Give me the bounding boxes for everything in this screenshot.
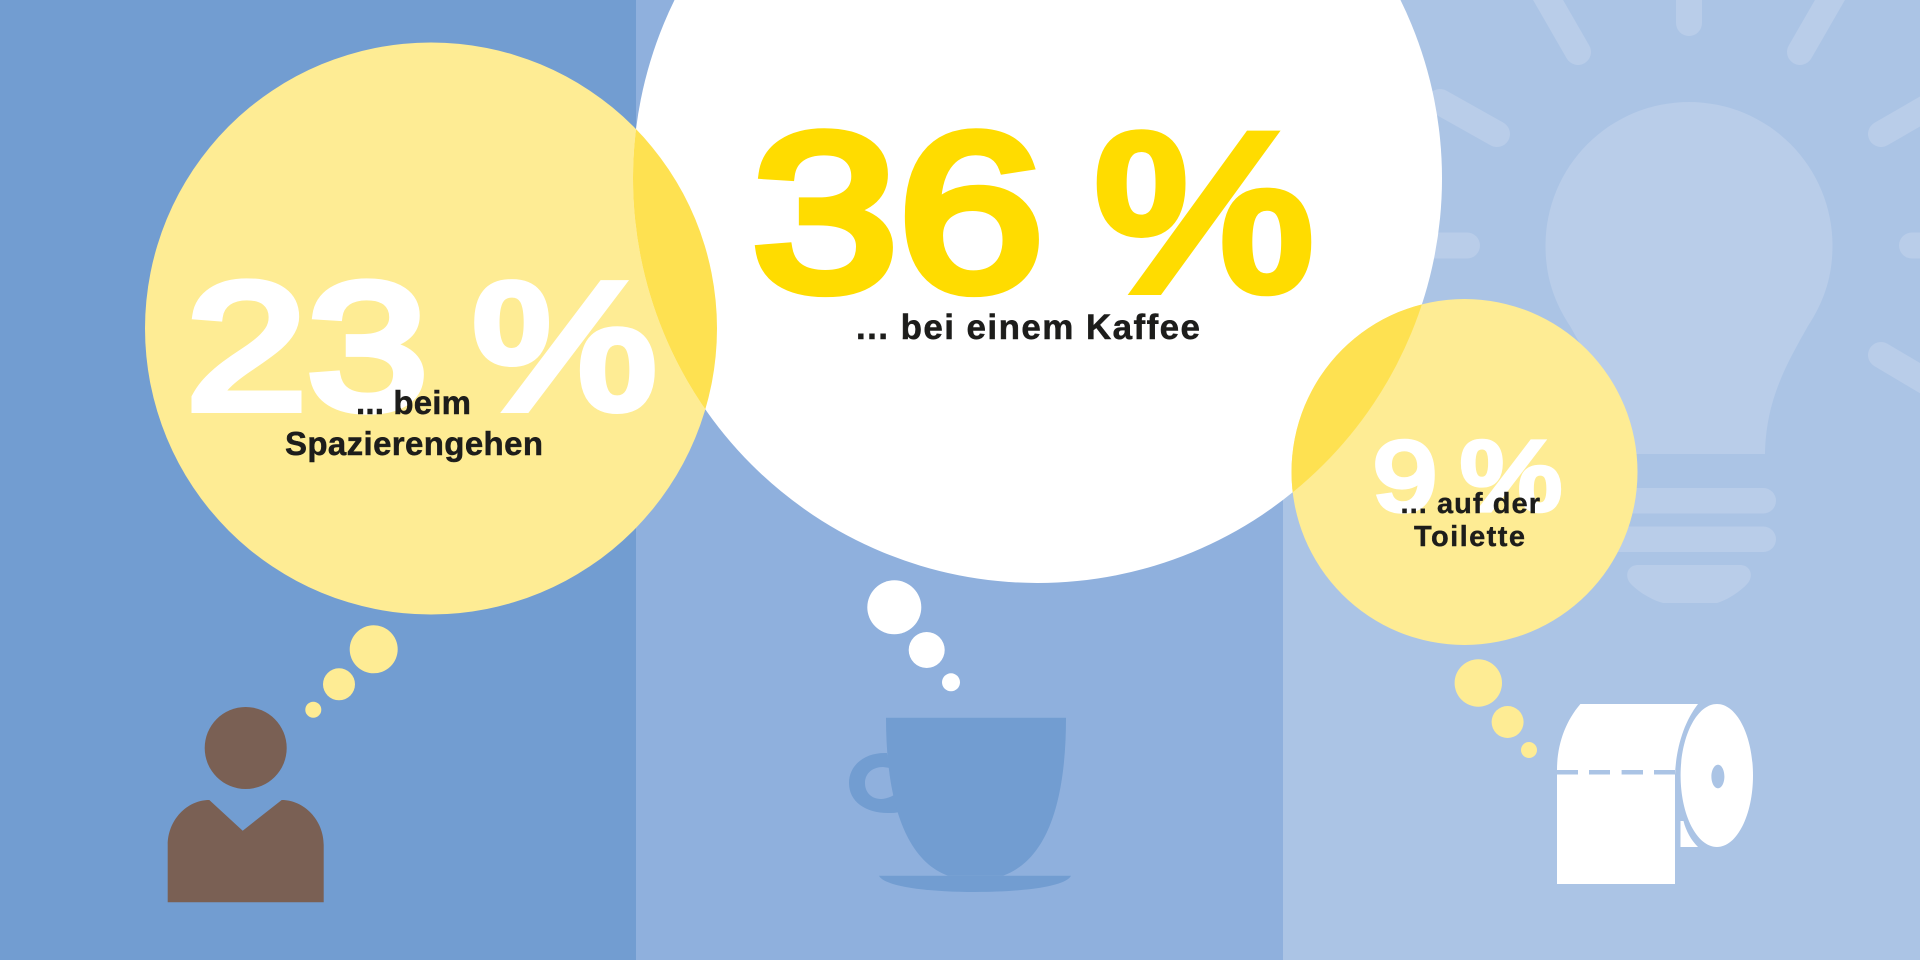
figure: 23 percent: 23: [186, 246, 428, 448]
figure: 36 percent: 36: [752, 88, 1044, 338]
panel: toilet background: [1283, 0, 1920, 960]
bubbles: toilet thought trail: [1455, 659, 1537, 758]
icon: toilet paper roll: [1557, 704, 1753, 884]
overlap: walking and coffee circles: [633, 129, 717, 410]
figure: 23 percent: %: [472, 246, 657, 448]
label: auf der Toilette: ... auf der: [1400, 488, 1540, 520]
bubbles: coffee thought trail: [867, 580, 960, 691]
label: auf der Toilette: [1400, 488, 1540, 553]
icon: person: [168, 707, 324, 902]
overlap: coffee and toilet circles: [1292, 304, 1422, 492]
label: beim Spazierengehen: [285, 384, 543, 462]
label: beim Spazierengehen: ... beim: [356, 384, 471, 421]
icon: light bulb with rays: [1425, 0, 1920, 603]
circle: walking thought bubble: [145, 42, 717, 614]
panel: coffee background: [636, 0, 1283, 960]
figure: 9 percent: %: [1460, 421, 1562, 531]
circle: toilet thought bubble: [1292, 299, 1638, 645]
figure: 36 percent: %: [1094, 88, 1314, 338]
panel: walking background: [0, 0, 636, 960]
label: beim Spazierengehen: Spazierengehen: [285, 425, 543, 462]
label: bei einem Kaffee: ... bei einem Kaffee: [856, 308, 1200, 347]
icon: coffee cup: [849, 718, 1071, 892]
bubbles: walking thought trail: [305, 625, 398, 718]
label: auf der Toilette: Toilette: [1414, 521, 1525, 553]
circle: coffee thought bubble: [633, 0, 1442, 583]
figure: 9 percent: 9: [1373, 421, 1437, 531]
